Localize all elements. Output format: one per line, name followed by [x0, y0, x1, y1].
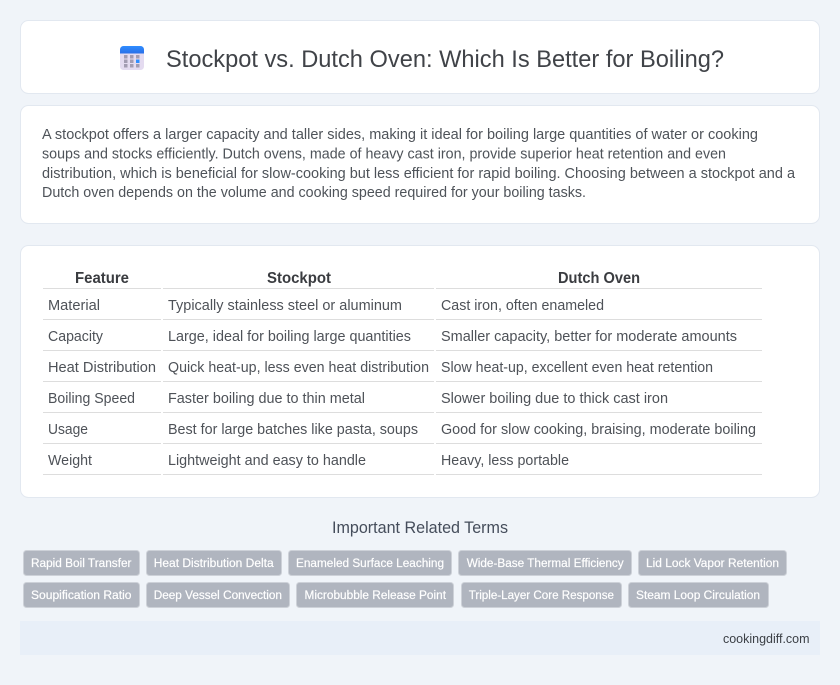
table row: boiling speed: Boiling Speed: [48, 391, 135, 407]
table row: heat distribution: [43, 360, 762, 382]
panel: related term tags: [24, 550, 786, 608]
text block: introduction: soups and stocks efficiently. Dutch ovens, made of heavy cast iron, provide superior heat retention and even: [42, 146, 726, 162]
icon: calendar: [120, 46, 144, 70]
panel: introduction paragraph: [20, 106, 820, 224]
table row: heat distribution: Heat Distribution: [48, 360, 156, 376]
panel: title header: [20, 20, 820, 94]
tag: Microbubble Release Point: Microbubble Release Point: [304, 588, 447, 602]
text block: introduction: [42, 127, 795, 201]
table row: usage: [43, 422, 762, 444]
table header row: [43, 270, 762, 289]
tag: Lid Lock Vapor Retention: Lid Lock Vapor Retention: [646, 556, 779, 570]
text block: introduction: Dutch oven depends on the volume and cooking speed required for your boiling tasks.: [42, 185, 586, 201]
tag: Steam Loop Circulation: Steam Loop Circulation: [636, 588, 760, 602]
tag: Rapid Boil Transfer: Rapid Boil Transfer: [31, 556, 132, 570]
tag: Heat Distribution Delta: Heat Distribution Delta: [154, 556, 274, 570]
tag: Wide-Base Thermal Efficiency: [458, 550, 632, 576]
table row: weight: [43, 453, 762, 475]
table row: boiling speed: Faster boiling due to thin metal: [168, 391, 365, 407]
table row: weight: Lightweight and easy to handle: [168, 453, 366, 469]
table row: heat distribution: Slow heat-up, excellent even heat retention: [441, 360, 713, 376]
table row: capacity: [43, 329, 762, 351]
table row: boiling speed: Slower boiling due to thick cast iron: [441, 391, 668, 407]
tag: Microbubble Release Point: [296, 582, 454, 608]
table row: capacity: Large, ideal for boiling large quantities: [168, 329, 411, 345]
footer: [20, 621, 820, 655]
table row: weight: Heavy, less portable: [441, 453, 569, 469]
tag: Enameled Surface Leaching: [288, 550, 452, 576]
table row: capacity: Smaller capacity, better for moderate amounts: [441, 329, 737, 345]
tag: Triple-Layer Core Response: [462, 582, 622, 608]
table row: material: Material: [48, 298, 100, 314]
text block: introduction: A stockpot offers a larger capacity and taller sides, making it ideal for boiling large quantities of water or cooking: [42, 127, 758, 143]
table row: boiling speed: [43, 391, 762, 413]
tag: Wide-Base Thermal Efficiency: Wide-Base Thermal Efficiency: [467, 556, 625, 570]
table row: weight: Weight: [48, 453, 92, 469]
table row: material: Typically stainless steel or aluminum: [168, 298, 402, 314]
table header row: Dutch Oven: [558, 270, 640, 287]
tag: Deep Vessel Convection: [146, 582, 290, 608]
footer site name: cookingdiff.com: [723, 631, 810, 646]
table row: capacity: Capacity: [48, 329, 104, 345]
table row: material: Cast iron, often enameled: [441, 298, 604, 314]
table header row: Feature: [75, 270, 129, 287]
tag: Lid Lock Vapor Retention: [638, 550, 786, 576]
table row: usage: Good for slow cooking, braising, moderate boiling: [441, 422, 756, 438]
table row: usage: Usage: [48, 422, 88, 438]
tag: Rapid Boil Transfer: [24, 550, 140, 576]
table row: material: [43, 298, 762, 320]
table row: heat distribution: Quick heat-up, less even heat distribution: [168, 360, 429, 376]
table row: usage: Best for large batches like pasta, soups: [168, 422, 418, 438]
tag: Deep Vessel Convection: Deep Vessel Convection: [154, 588, 282, 602]
title: Stockpot vs. Dutch Oven: Which Is Better for Boiling?: [166, 46, 724, 73]
text block: introduction: distribution, which is beneficial for slow-cooking but less efficient for rapid boiling. Choosing between a stockpot and a: [42, 166, 795, 182]
tag: Heat Distribution Delta: [146, 550, 282, 576]
tag: Triple-Layer Core Response: Triple-Layer Core Response: [469, 588, 614, 602]
tag: Soupification Ratio: [24, 582, 140, 608]
heading: important related terms: Important Related Terms: [332, 519, 508, 537]
tag: Enameled Surface Leaching: Enameled Surface Leaching: [296, 556, 444, 570]
table header row: Stockpot: [267, 270, 331, 287]
tag: Soupification Ratio: Soupification Ratio: [31, 588, 132, 602]
panel: comparison table: [20, 246, 820, 498]
tag: Steam Loop Circulation: [628, 582, 768, 608]
